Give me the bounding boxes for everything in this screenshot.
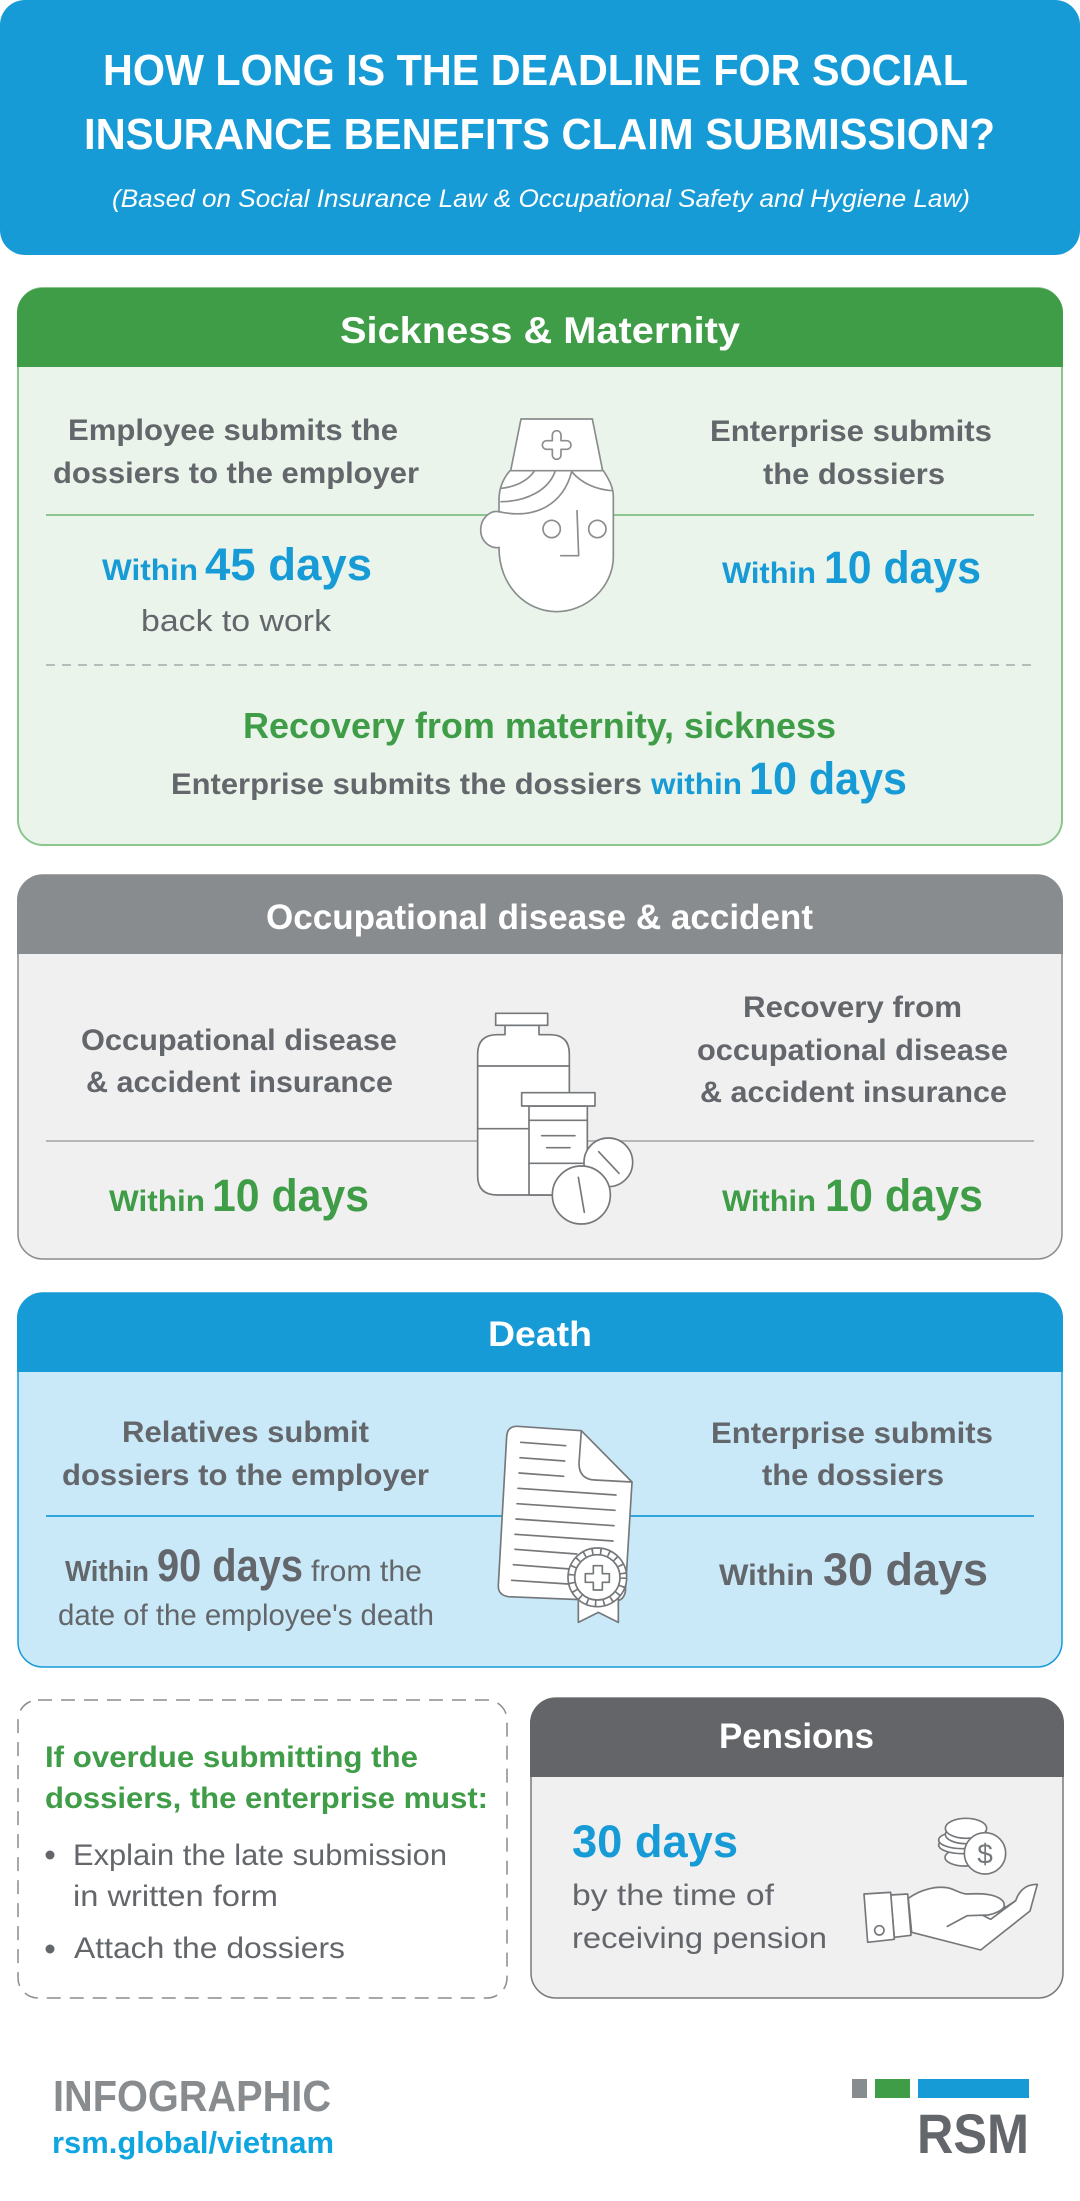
text: relatives submit: Relatives submit xyxy=(122,1416,369,1449)
panel: occupational disease and accident xyxy=(17,875,1063,1259)
text: enterprise submits xyxy=(711,1417,993,1492)
text: relatives submit xyxy=(62,1416,429,1492)
deadline: within 10 days, left: 10 days xyxy=(212,1170,369,1221)
icon: open hand xyxy=(864,1884,1037,1950)
deadline: within 30 days xyxy=(719,1544,988,1595)
text: recovery from occupational disease and accident insurance xyxy=(697,991,1008,1109)
text: relatives submit: dossiers to the employer xyxy=(62,1459,429,1492)
heading: if overdue: dossiers, the enterprise must: xyxy=(45,1782,488,1815)
icon: coins xyxy=(939,1818,1006,1874)
text: recovery from occupational disease and accident insurance: Recovery from xyxy=(743,991,962,1024)
text: enterprise submits: Enterprise submits xyxy=(711,1417,993,1450)
text: by the time of receiving pension xyxy=(572,1879,827,1955)
text: recovery from occupational disease and accident insurance: occupational disease xyxy=(697,1034,1008,1067)
deadline: within 45 days: Within xyxy=(102,554,198,587)
icon: document with seal xyxy=(498,1426,632,1622)
deadline: within 30 days: Within xyxy=(719,1559,814,1592)
text: enterprise submits within 10 days xyxy=(171,753,907,804)
deadline: within 30 days: 30 days xyxy=(823,1544,988,1595)
panel heading: sickness and maternity xyxy=(17,288,1063,367)
panel heading: death: Death xyxy=(488,1315,592,1354)
deadline: within 45 days xyxy=(102,539,372,590)
text: employee submits: Employee submits the xyxy=(68,414,398,447)
bullet: attach the dossiers: Attach the dossiers xyxy=(74,1932,345,1965)
deadline: within 10 days, right: Within xyxy=(722,1185,816,1218)
title banner xyxy=(0,0,1080,255)
text: enterprise submits xyxy=(710,415,992,491)
title: INSURANCE BENEFITS CLAIM SUBMISSION? xyxy=(84,110,995,159)
text: employee submits xyxy=(53,414,419,490)
title: HOW LONG IS THE DEADLINE FOR SOCIAL xyxy=(103,46,968,95)
panel: overdue submission note xyxy=(18,1700,507,1998)
text: occupational disease and accident insurance xyxy=(81,1024,397,1099)
panel heading: sickness and maternity: Sickness & Maternity xyxy=(340,310,740,351)
bullet: explain the late submission xyxy=(46,1839,447,1913)
text: by the time of receiving pension: by the time of xyxy=(572,1879,775,1912)
text: enterprise submits within 10 days: within xyxy=(650,768,742,801)
panel: sickness and maternity xyxy=(17,288,1063,845)
panel heading: pensions xyxy=(530,1698,1064,1777)
text: recovery from occupational disease and accident insurance: & accident insurance xyxy=(700,1076,1007,1109)
deadline: within 10 days: 10 days xyxy=(824,542,981,593)
text: employee submits: dossiers to the employer xyxy=(53,457,419,490)
panel heading: occupational disease and accident xyxy=(17,875,1063,954)
text: back to work: back to work xyxy=(141,603,332,638)
heading: if overdue: If overdue submitting the xyxy=(45,1741,418,1774)
deadline: 30 days: 30 days xyxy=(572,1816,738,1867)
deadline: within 10 days, right xyxy=(722,1170,983,1221)
deadline: within 90 days from the date of the employee's death: date of the employee's death xyxy=(58,1599,434,1632)
panel heading: death xyxy=(17,1293,1063,1372)
deadline: within 45 days: 45 days xyxy=(205,539,372,590)
text: enterprise submits: the dossiers xyxy=(762,1459,944,1492)
logo: RSM xyxy=(852,2079,1029,2165)
text: occupational disease and accident insurance: Occupational disease xyxy=(81,1024,397,1057)
deadline: within 90 days from the date of the employee's death: from the xyxy=(311,1555,422,1588)
subtitle: (Based on Social Insurance Law & Occupational Safety and Hygiene Law) xyxy=(112,185,970,213)
panel: pensions xyxy=(530,1698,1064,1998)
icon: coins: $ xyxy=(977,1838,993,1869)
heading: if overdue xyxy=(45,1741,488,1815)
deadline: within 90 days from the date of the employee's death: 90 days xyxy=(157,1540,303,1591)
text: enterprise submits within 10 days: Enterprise submits the dossiers xyxy=(171,768,642,801)
title xyxy=(84,46,995,159)
text: enterprise submits: Enterprise submits xyxy=(710,415,992,448)
deadline: within 10 days, left xyxy=(109,1170,369,1221)
icon: medicine bottles and pills xyxy=(478,1013,633,1224)
panel heading: occupational disease and accident: Occupational disease & accident xyxy=(266,898,813,937)
footer: infographic label: INFOGRAPHIC xyxy=(53,2072,331,2121)
footer: website: rsm.global/vietnam xyxy=(52,2125,334,2160)
heading: recovery from maternity, sickness: Recovery from maternity, sickness xyxy=(243,705,836,746)
text: occupational disease and accident insurance: & accident insurance xyxy=(86,1066,393,1099)
bullet: explain the late submission: in written form xyxy=(73,1880,278,1913)
text: enterprise submits within 10 days: 10 days xyxy=(749,753,907,804)
deadline: within 10 days xyxy=(722,542,981,593)
panel: death xyxy=(17,1293,1063,1667)
bullet: explain the late submission: Explain the late submission xyxy=(73,1839,447,1872)
text: enterprise submits: the dossiers xyxy=(763,458,945,491)
deadline: within 90 days from the date of the employee's death: Within xyxy=(65,1556,149,1588)
panel heading: pensions: Pensions xyxy=(719,1717,874,1756)
deadline: within 10 days: Within xyxy=(722,557,816,590)
icon: nurse xyxy=(481,419,613,612)
logo: RSM: RSM xyxy=(917,2102,1029,2165)
deadline: within 90 days from the date of the employee's death xyxy=(58,1540,434,1632)
text: by the time of receiving pension: receiving pension xyxy=(572,1922,827,1955)
deadline: within 10 days, right: 10 days xyxy=(825,1170,983,1221)
deadline: within 10 days, left: Within xyxy=(109,1185,205,1218)
